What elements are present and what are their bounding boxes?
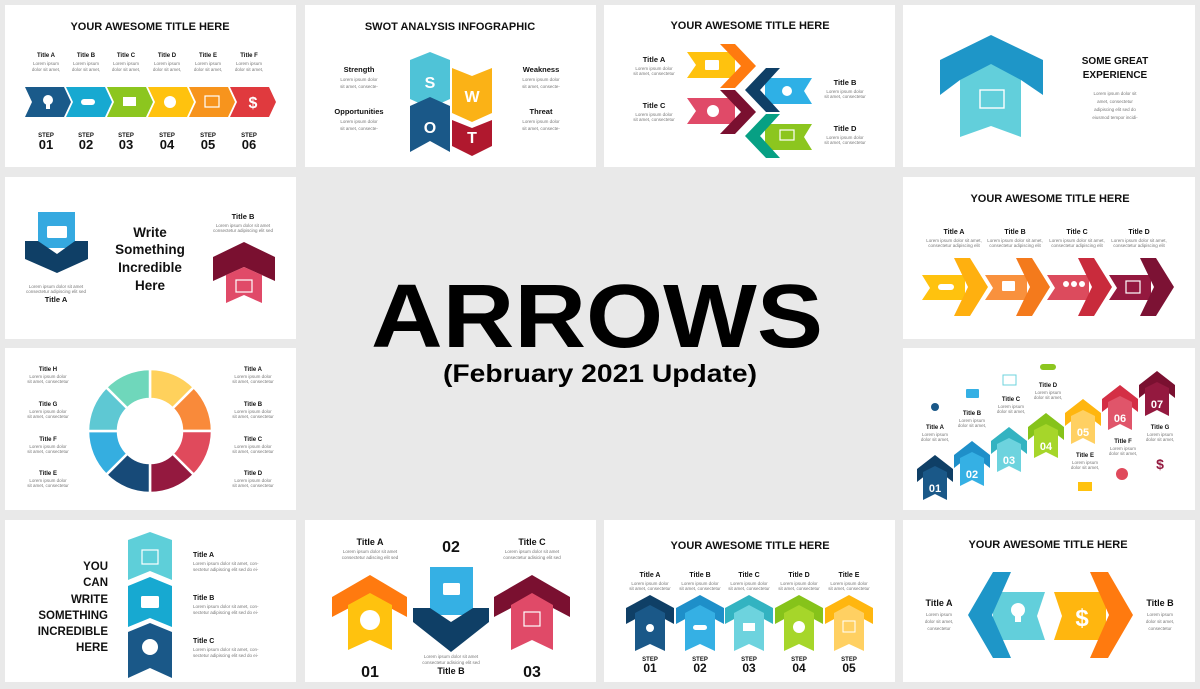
cycle labels: Title E [39,471,57,477]
arrow 03: Lorem ipsum dolor sit amet [505,549,560,554]
cycle labels: sit amet, consectetur [232,449,274,454]
cycle labels: Lorem ipsum dolor [234,478,272,483]
heading: YOUR AWESOME TITLE HERE [970,193,1130,205]
cycle labels: Lorem ipsum dolor [234,444,272,449]
cycle labels: Lorem ipsum dolor [29,478,67,483]
staircase labels and icons: dolor sit amet, [1146,437,1174,442]
titles: sit amet, consectetur [828,586,870,591]
cycle labels: Lorem ipsum dolor [234,374,272,379]
heading: YOUR AWESOME TITLE HERE [670,540,830,552]
chevron cluster [687,44,812,158]
step numbers: 02 [693,661,707,675]
staircase: 06 [1114,413,1126,425]
icon: up arrow [213,242,275,303]
panel: six step arrows [5,5,296,167]
icon: down arrow [25,212,88,273]
staircase: 04 [1040,441,1053,453]
panel: converging chevrons [604,5,895,167]
step titles: dolor sit amet, [32,67,60,72]
panel: SWOT [305,5,596,167]
arrow 02: 02 [442,539,460,556]
SWOT labels: Lorem ipsum dolor [340,119,378,124]
step titles: Title E [199,53,217,59]
staircase: 03 [1003,455,1015,467]
panel: five up arrows [604,520,895,682]
step numbers: 05 [201,137,215,152]
labels [925,598,1174,631]
staircase: 07 [1151,399,1163,411]
titles: Lorem ipsum dolor [730,581,768,586]
arrow 01: Title A [356,537,384,547]
staircase labels and icons: dolor sit amet, [958,423,986,428]
SWOT labels [334,65,560,131]
cycle labels: Title H [39,367,57,373]
labels: sectetur adipiscing elit sed do ei- [193,653,259,658]
heading [115,225,185,293]
step numbers: STEP [241,133,257,139]
arrow pair [968,572,1133,658]
titles: Lorem ipsum dolor [830,581,868,586]
step numbers: 03 [742,661,756,675]
SWOT labels: sit amet, consecte- [340,84,378,89]
cycle labels: Title A [244,367,263,373]
text block: Lorem ipsum dolor sit [1093,91,1137,96]
step titles: Title F [240,53,258,59]
staircase labels and icons: dolor sit amet, [997,409,1025,414]
text block: EXPERIENCE [1083,70,1148,81]
SWOT labels: Lorem ipsum dolor [522,77,560,82]
cycle labels: sit amet, consectetur [232,379,274,384]
staircase labels and icons: dolor sit amet, [1071,465,1099,470]
step titles: Title C [117,53,136,59]
staircase labels and icons: Title C [1002,397,1021,403]
SWOT labels: Threat [530,107,553,116]
text: Title B: Lorem ipsum dolor sit amet [216,223,271,228]
labels: Lorem ipsum dolor sit amet, con- [193,561,259,566]
staircase labels and icons: Lorem ipsum [959,418,985,423]
step numbers: STEP [791,657,807,663]
labels: Title B [193,595,214,602]
staircase: 05 [1077,427,1089,439]
SWOT blocks: O [424,120,436,137]
text: Title B: consectetur adipiscing elit sed [213,228,274,233]
labels: sit amet, consectetur [633,71,675,76]
step titles: Lorem ipsum [73,61,99,66]
panel: four arrows row [903,177,1195,339]
SWOT blocks [410,52,492,156]
step numbers: STEP [741,657,757,663]
labels: sectetur adipiscing elit sed do ei- [193,567,259,572]
labels: dolor sit amet, [925,619,953,624]
labels: sit amet, consectetur [633,117,675,122]
labels: sit amet, consectetur [824,140,866,145]
cycle labels: Lorem ipsum dolor [29,374,67,379]
staircase labels and icons: Title F [1114,439,1132,445]
step numbers [38,133,257,152]
titles: Lorem ipsum dolor [780,581,818,586]
arrow 02 [413,539,489,676]
titles: Lorem ipsum dolor sit amet, [1111,238,1167,243]
heading: YOUR AWESOME TITLE HERE [670,20,830,32]
step titles: dolor sit amet, [235,67,263,72]
labels: Title B [1146,598,1174,608]
titles: consectetur adipiscing elit [1113,243,1166,248]
heading: YOUR AWESOME TITLE HERE [70,21,230,33]
titles: Lorem ipsum dolor [681,581,719,586]
step numbers: 02 [79,137,93,152]
arrow 01: Lorem ipsum dolor sit amet [343,549,398,554]
step numbers: 01 [39,137,53,152]
staircase: 01 [929,483,941,495]
chevron row [25,87,276,117]
step numbers: STEP [692,657,708,663]
panel: up-down-up arrows [305,520,596,682]
step numbers: STEP [642,657,658,663]
SWOT labels: sit amet, consecte- [522,126,560,131]
step titles: Lorem ipsum [113,61,139,66]
labels: Lorem ipsum [926,612,952,617]
text block: YOU [83,561,108,573]
titles [926,229,1167,248]
SWOT labels: Weakness [523,65,559,74]
arrow 03 [494,537,570,681]
titles: Title C [1066,229,1088,236]
labels: Title A [643,55,666,64]
step numbers: STEP [118,133,134,139]
heading: Incredible [118,260,182,275]
labels: sit amet, consectetur [824,94,866,99]
titles: sit amet, consectetur [728,586,770,591]
cycle labels: Lorem ipsum dolor [234,409,272,414]
step numbers: 03 [119,137,133,152]
staircase labels and icons: dolor sit amet, [1109,451,1137,456]
heading: Something [115,242,185,257]
arrow 03: Title C [518,537,546,547]
panel: write something incredible [5,177,296,339]
step numbers [642,657,857,675]
step numbers: 04 [792,661,806,675]
text block [38,561,108,654]
staircase labels and icons: Title E [1076,453,1094,459]
labels: Lorem ipsum dolor [635,66,673,71]
SWOT labels: sit amet, consecte- [522,84,560,89]
step titles: Title A [37,53,56,59]
titles: Title A [639,572,661,579]
step titles: Lorem ipsum [154,61,180,66]
labels: Title B [834,78,857,87]
step titles: dolor sit amet, [194,67,222,72]
arrow 03: 03 [523,664,541,681]
text block: SOME GREAT [1082,56,1148,67]
arrow 02: Title B [437,666,465,676]
titles: Lorem ipsum dolor sit amet, [926,238,982,243]
panel: cycle [5,348,296,510]
step numbers: STEP [159,133,175,139]
labels [633,55,866,145]
cycle labels: sit amet, consectetur [27,379,69,384]
staircase: 02 [966,469,978,481]
titles: sit amet, consectetur [629,586,671,591]
staircase labels and icons: Title D [1039,383,1058,389]
staircase labels and icons [921,364,1174,491]
labels: sectetur adipiscing elit sed do ei- [193,610,259,615]
titles: Title B [1004,229,1026,236]
SWOT labels: Lorem ipsum dolor [522,119,560,124]
step titles: Lorem ipsum [33,61,59,66]
panel: some great experience [903,5,1195,167]
labels: Lorem ipsum dolor [826,89,864,94]
step numbers: 06 [242,137,256,152]
text block: HERE [76,642,108,654]
labels: Lorem ipsum dolor sit amet, con- [193,604,259,609]
chevron row: $ [249,95,258,112]
labels: dolor sit amet, [1146,619,1174,624]
titles: consectetur adipiscing elit [1051,243,1104,248]
titles: sit amet, consectetur [679,586,721,591]
titles: Title E [839,572,860,579]
arrow 01: 01 [361,664,379,681]
labels: consectetur [927,626,951,631]
SWOT blocks: W [464,89,480,106]
subtitle: (February 2021 Update) [443,360,757,388]
step titles: Title B [77,53,96,59]
titles: Title D [1128,229,1150,236]
SWOT labels: Lorem ipsum dolor [340,77,378,82]
step numbers: STEP [38,133,54,139]
SWOT blocks: S [425,75,436,92]
arrow 02: Lorem ipsum dolor sit amet [424,654,479,659]
labels: Lorem ipsum [1147,612,1173,617]
step titles: dolor sit amet, [153,67,181,72]
labels: Title C [193,638,214,645]
titles: Title B [689,572,711,579]
arrow 01 [332,537,407,681]
step titles [32,53,263,72]
text block: WRITE [71,594,108,606]
text: Title A: consectetur adipiscing elit sed [26,289,87,294]
step numbers: STEP [200,133,216,139]
labels: Title C [643,101,666,110]
cycle labels: Lorem ipsum dolor [29,444,67,449]
vertical arrows [128,532,172,678]
staircase labels and icons: Lorem ipsum [1072,460,1098,465]
heading: SWOT ANALYSIS INFOGRAPHIC [365,21,535,33]
labels: consectetur [1148,626,1172,631]
titles: Title A [943,229,965,236]
titles: Title D [788,572,810,579]
step numbers: STEP [78,133,94,139]
step titles: Lorem ipsum [236,61,262,66]
cycle labels: Lorem ipsum dolor [29,409,67,414]
arrow 01: consectetur adiscing elit sed [342,555,399,560]
cycle ring chart [88,369,212,493]
staircase labels and icons: Lorem ipsum [1035,390,1061,395]
SWOT labels: Strength [344,65,375,74]
text block: SOMETHING [38,610,108,622]
staircase labels and icons: Title G [1151,425,1170,431]
labels: Title A [925,598,953,608]
text: Title A [26,284,87,304]
titles: Lorem ipsum dolor sit amet, [1049,238,1105,243]
labels: Lorem ipsum dolor [635,112,673,117]
titles [629,572,870,591]
titles: consectetur adipiscing elit [928,243,981,248]
labels: Title A [193,552,214,559]
arrow 02: consectetur adisicing elit sed [422,660,480,665]
SWOT labels: Opportunities [334,107,384,116]
text block: adipiscing elit sed do [1094,107,1136,112]
title: ARROWS: ARROWS [371,267,823,367]
staircase labels and icons: Title B [963,411,982,417]
cycle labels: sit amet, consectetur [232,483,274,488]
text: Title A: Lorem ipsum dolor sit amet [29,284,84,289]
up arrows [626,595,873,651]
panel: vertical stack [5,520,296,682]
labels [193,552,259,658]
titles: Title C [738,572,760,579]
step numbers: 04 [160,137,175,152]
arrow pair: $ [1075,605,1089,632]
cycle labels [27,367,274,488]
text block: eiusmod tempor incidi- [1092,115,1138,120]
SWOT blocks: T [467,130,477,147]
heading: Write [133,225,167,240]
heading: Here [135,278,165,293]
staircase labels and icons: dolor sit amet, [1034,395,1062,400]
cycle labels: sit amet, consectetur [27,483,69,488]
titles: Lorem ipsum dolor [631,581,669,586]
text: Title B: Title B [232,212,255,221]
text: Title B [213,212,274,233]
cycle labels: Title C [244,437,263,443]
step titles: Title D [158,53,177,59]
SWOT labels: sit amet, consecte- [340,126,378,131]
step titles: dolor sit amet, [112,67,140,72]
text block: CAN [83,577,108,589]
cycle labels: sit amet, consectetur [232,414,274,419]
staircase labels and icons: Lorem ipsum [1110,446,1136,451]
cycle labels: sit amet, consectetur [27,414,69,419]
staircase [917,371,1175,500]
cycle labels: Title B [244,402,263,408]
step titles: dolor sit amet, [72,67,100,72]
step numbers: STEP [841,657,857,663]
cycle labels: Title G [39,402,58,408]
text: Title A: Title A [45,295,68,304]
cycle labels: sit amet, consectetur [27,449,69,454]
step numbers: 05 [842,661,856,675]
titles: consectetur adipiscing elit [989,243,1042,248]
text block: amet, consectetur [1097,99,1133,104]
text block [1082,56,1148,120]
cycle labels: Title D [244,471,263,477]
arrow 03: consectetur adisicing elit sed [503,555,561,560]
staircase labels and icons: Lorem ipsum [1147,432,1173,437]
titles: Lorem ipsum dolor sit amet, [987,238,1043,243]
staircase labels and icons: Lorem ipsum [922,432,948,437]
panel: staircase arrows [903,348,1195,510]
step titles: Lorem ipsum [195,61,221,66]
staircase labels and icons: Title A [926,425,945,431]
labels: Lorem ipsum dolor [826,135,864,140]
step numbers: 01 [643,661,657,675]
staircase labels and icons: dolor sit amet, [921,437,949,442]
staircase labels and icons: Lorem ipsum [998,404,1024,409]
labels: Title D [834,124,857,133]
icon: big up arrow [940,35,1043,137]
heading: YOUR AWESOME TITLE HERE [968,539,1128,551]
panel: opposing arrows [903,520,1195,682]
titles: sit amet, consectetur [778,586,820,591]
cycle labels: Title F [39,437,57,443]
labels: Lorem ipsum dolor sit amet, con- [193,647,259,652]
arrows [922,258,1174,316]
text block: INCREDIBLE [38,626,108,638]
staircase labels and icons: $ [1156,456,1164,472]
